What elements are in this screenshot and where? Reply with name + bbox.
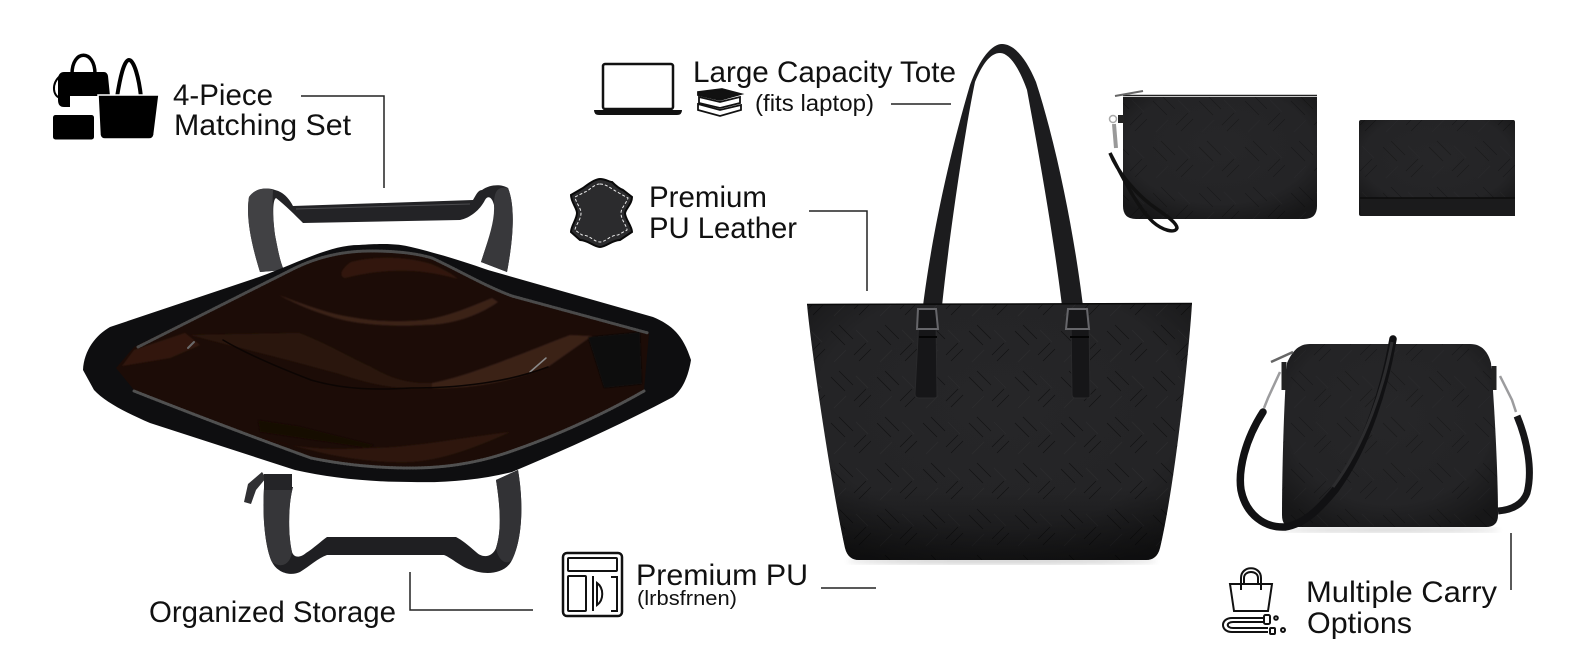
icon: compartment organizer (563, 553, 622, 616)
label: Organized Storage: Organized Storage (149, 596, 396, 629)
lining details (122, 258, 642, 462)
left strap tab and buckle (915, 309, 938, 398)
label: 4-Piece Matching Set: Matching Set (174, 109, 352, 142)
product: wristlet clutch (1110, 91, 1317, 231)
label: fits laptop: (fits laptop) (755, 90, 874, 116)
leader line (891, 103, 951, 105)
crossing strap (1240, 339, 1393, 527)
product: open tote seen from above (83, 185, 691, 574)
tote handles (923, 44, 1083, 306)
icon: stack of books (698, 89, 741, 116)
callout: large capacity tote (594, 56, 956, 116)
icon: matching bags silhouette (53, 55, 159, 140)
icon: laptop (594, 64, 682, 115)
label: Premium PU: Premium PU (636, 559, 808, 592)
icon: shoulder strap (1223, 615, 1285, 634)
label: 4-Piece Matching Set (173, 79, 352, 142)
label: Multiple Carry Options: Multiple Carry (1306, 576, 1497, 609)
callout: premium PU compartments (563, 553, 876, 616)
ground shadow (1280, 528, 1500, 532)
zippers (134, 251, 648, 468)
callout: 4-piece matching set (53, 55, 384, 188)
label: Premium PU Leather: PU Leather (649, 212, 797, 245)
ground shadow (847, 558, 1157, 564)
wrist strap (1110, 153, 1177, 231)
callout: multiple carry options (1223, 533, 1511, 640)
label: Multiple Carry Options (1306, 576, 1497, 640)
label: Premium PU Leather (649, 181, 797, 245)
product: wallet (1359, 120, 1515, 216)
leader line (410, 572, 533, 610)
icon: leather hide (571, 179, 632, 247)
tote body (807, 303, 1192, 560)
right strap end (1498, 416, 1529, 511)
product: crossbody bag (1240, 339, 1529, 532)
callout: organized storage (149, 572, 533, 629)
bag outer shell (83, 244, 691, 482)
wrist clasp (1110, 115, 1124, 148)
bag body (1282, 344, 1498, 527)
icon: handbag outline (1230, 568, 1272, 611)
label: Large Capacity Tote: Large Capacity Tote (693, 56, 956, 89)
label: Multiple Carry Options: Options (1307, 607, 1412, 640)
leader line (821, 587, 876, 589)
label: sub text: (lrbsfrnen) (637, 588, 737, 610)
leader line (301, 96, 384, 188)
bag lining (116, 250, 649, 467)
leader line (809, 211, 867, 291)
label: Premium PU Leather: Premium (649, 181, 767, 214)
leader line (1510, 533, 1512, 590)
top handles (248, 185, 513, 272)
product: large tote front view (807, 44, 1192, 564)
metal clasps (1264, 352, 1516, 412)
callout: premium PU leather (571, 179, 867, 291)
right strap tab and buckle (1066, 309, 1090, 398)
label: 4-Piece Matching Set: 4-Piece (173, 79, 273, 112)
bottom handles (244, 470, 521, 574)
